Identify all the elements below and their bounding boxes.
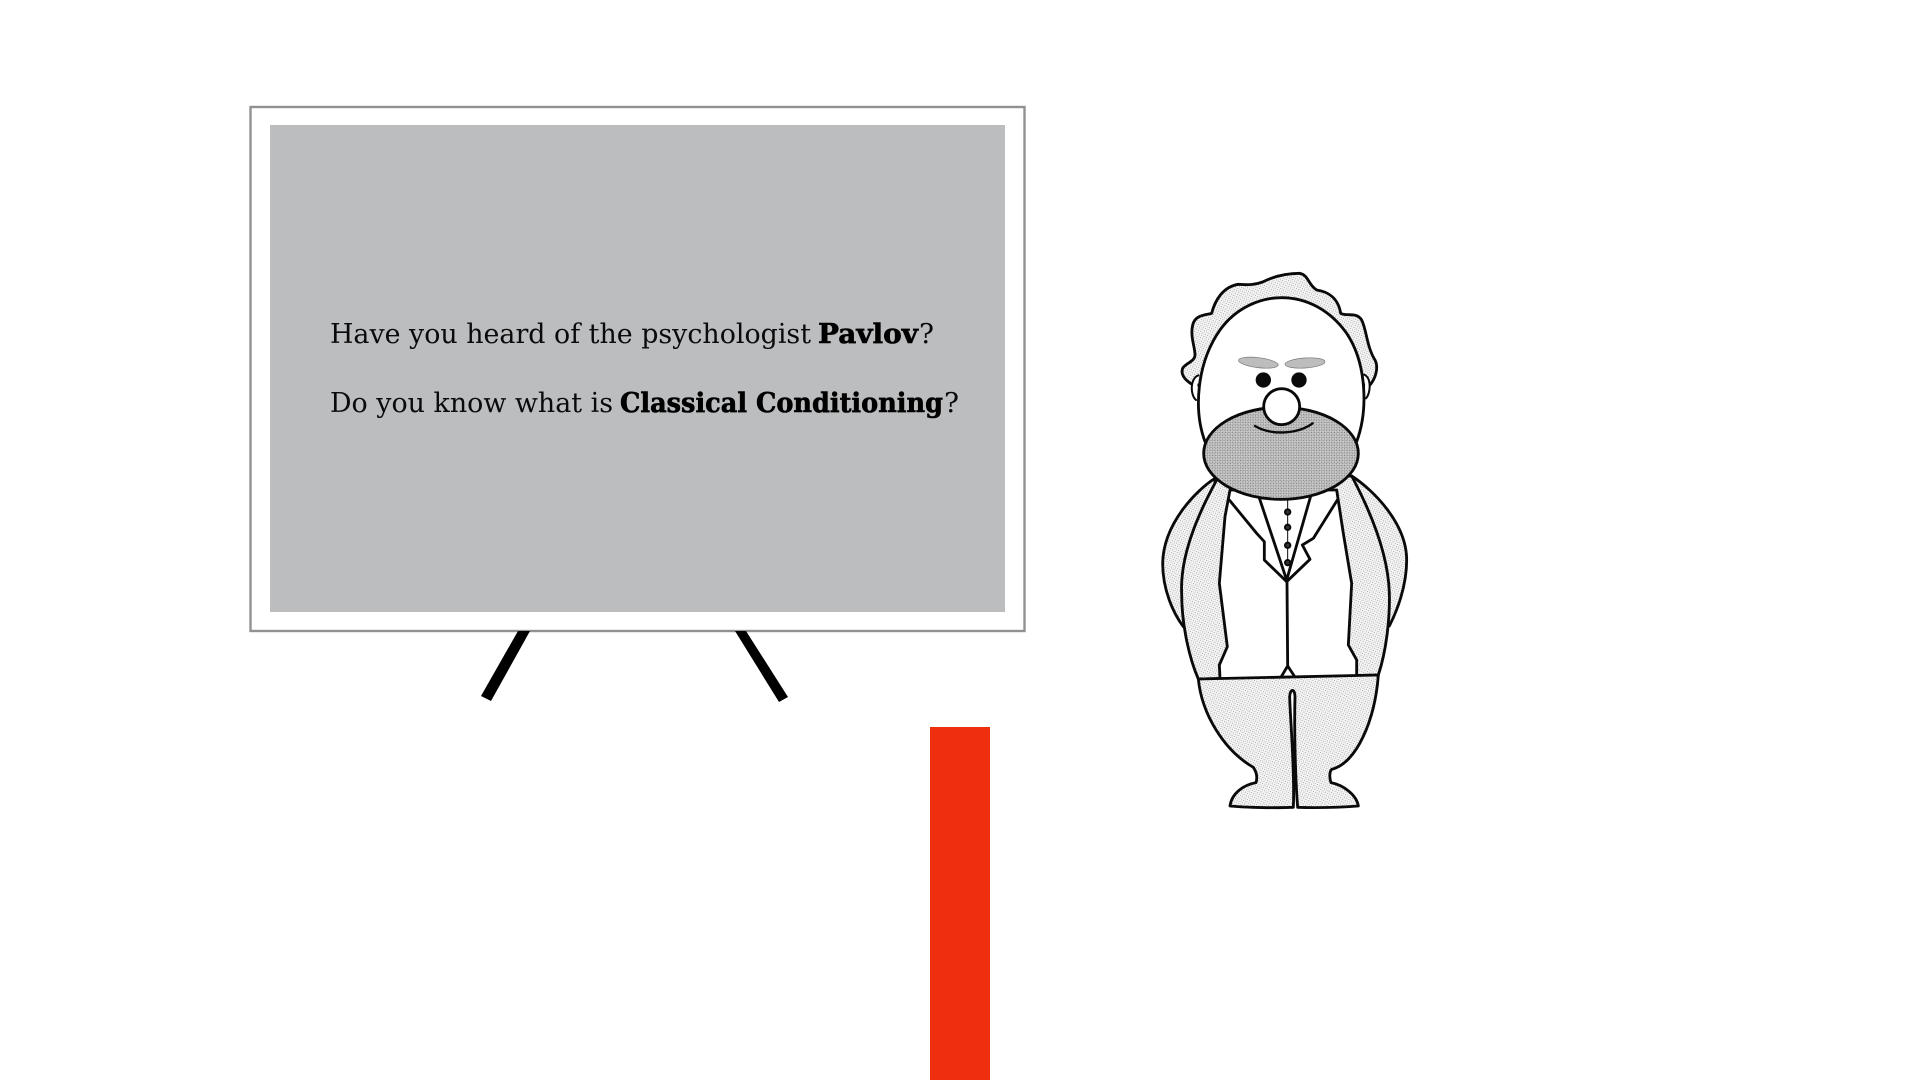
board screen xyxy=(270,125,1005,612)
mouth xyxy=(1255,423,1313,432)
right ear xyxy=(1364,375,1370,398)
shirt opening xyxy=(1258,495,1311,580)
face xyxy=(1198,298,1364,442)
left ear xyxy=(1192,375,1198,400)
line 2: question about Classical Conditioning xyxy=(330,388,959,419)
line 1: question about Pavlov: Have you heard of the psychologist xyxy=(330,319,811,350)
right eyebrow xyxy=(1285,357,1325,369)
hair xyxy=(1182,273,1377,385)
coat center line xyxy=(1282,582,1294,676)
nose xyxy=(1264,389,1300,425)
body xyxy=(1163,476,1407,808)
board text xyxy=(330,319,959,419)
presentation board xyxy=(250,107,1024,702)
beard xyxy=(1204,407,1358,499)
trousers xyxy=(1198,675,1378,808)
line 1: question about Pavlov: Pavlov xyxy=(818,319,919,350)
left eyebrow xyxy=(1238,355,1279,370)
board legs xyxy=(481,631,788,702)
shirt buttons xyxy=(1285,500,1290,565)
line 2: question about Classical Conditioning: Classical Conditioning xyxy=(620,388,943,419)
line 1: question about Pavlov: ? xyxy=(919,319,934,350)
left lapel xyxy=(1229,500,1287,582)
vest xyxy=(1219,490,1357,679)
left eye xyxy=(1256,372,1271,388)
right eye xyxy=(1291,372,1307,388)
head xyxy=(1182,273,1377,499)
arm behind left xyxy=(1163,478,1215,627)
line 2: question about Classical Conditioning: Do you know what is xyxy=(330,388,613,419)
red vertical bar xyxy=(930,727,990,1080)
line 2: question about Classical Conditioning: ? xyxy=(944,388,959,419)
character: Pavlov xyxy=(1163,273,1407,808)
board frame xyxy=(250,107,1024,631)
arm behind right xyxy=(1352,476,1407,626)
right lapel xyxy=(1287,500,1337,582)
coat xyxy=(1182,476,1389,679)
